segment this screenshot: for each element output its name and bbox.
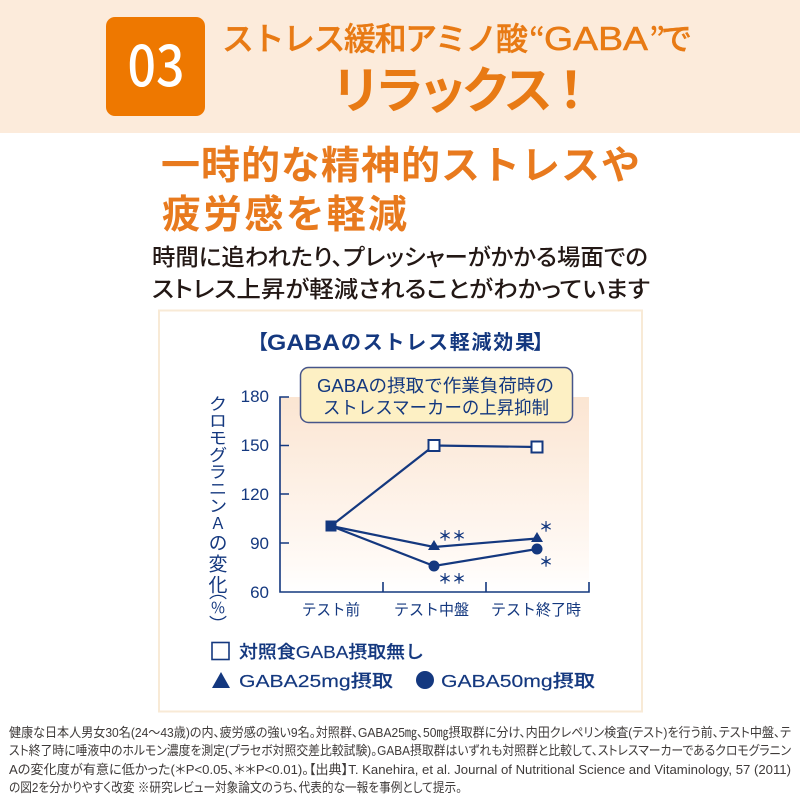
number badge 03 (106, 17, 205, 116)
plot background (280, 397, 589, 592)
y axis title: （ (205, 582, 231, 600)
x axis labels (302, 598, 581, 620)
chart title: 】 (533, 326, 553, 355)
chart title: GABA (267, 330, 340, 355)
number badge 03: 03 (128, 22, 184, 103)
y axis title: クロモグラニン (205, 395, 231, 514)
panel: chart card (159, 310, 642, 712)
x axis labels: テスト終了時 (491, 598, 581, 620)
significance asterisks: ＊ (539, 517, 553, 537)
chart title: 【 (248, 326, 268, 355)
y axis tick labels: 180 (241, 387, 269, 406)
main heading: 一時的な精神的ストレスや (161, 135, 640, 191)
callout (300, 368, 572, 422)
legend: 25mg: GABA25mg摂取 (239, 671, 394, 691)
significance asterisks: ＊ (539, 552, 553, 572)
legend: 50mg: GABA50mg摂取 (441, 671, 596, 691)
header title: ！ (546, 51, 596, 123)
header subtitle: で (661, 14, 692, 59)
y axis title: の変化 (204, 533, 232, 594)
header subtitle: “ (529, 14, 545, 59)
footnote: Aの変化度が有意に低かった(＊P<0.05、＊＊P<0.01)。【出典】T. Kanehira, et al. Journal of Nutritional Science and Vitaminology, 57 (2011) (9, 762, 791, 777)
legend (212, 642, 596, 691)
header title: リラックス (331, 51, 553, 123)
series: GABA 50mg (331, 526, 542, 572)
legend: control: 対照食GABA摂取無し (239, 642, 424, 662)
x axis labels: テスト前 (302, 598, 360, 620)
line chart axes (280, 397, 589, 592)
x axis labels: テスト中盤 (394, 598, 469, 620)
footnote (9, 725, 791, 795)
description text: 時間に追われたり、プレッシャーがかかる場面での (152, 238, 648, 272)
main heading (161, 135, 640, 240)
description text (152, 238, 650, 304)
header subtitle: GABA (544, 20, 648, 57)
y axis tick labels: 150 (241, 436, 269, 455)
description text: ストレス上昇が軽減されることがわかっています (152, 270, 650, 304)
header subtitle: ストレス緩和アミノ酸 (222, 14, 528, 60)
header subtitle: ” (649, 14, 665, 59)
y axis tick labels (241, 387, 269, 602)
chart title: のストレス軽減効果 (341, 326, 535, 355)
series: control (331, 440, 542, 526)
y axis title: ） (205, 615, 231, 633)
y axis title: Ａ (206, 515, 230, 531)
y axis tick labels: 90 (250, 534, 269, 553)
y axis title: ％ (208, 600, 228, 615)
start marker (326, 520, 336, 532)
y axis tick labels: 120 (241, 485, 269, 504)
y axis tick labels: 60 (250, 583, 269, 602)
main heading: 疲労感を軽減 (162, 184, 407, 240)
footnote: の図2を分かりやすく改変 ※研究レビュー対象論文のうち、代表的な一報を事例として提示。 (9, 780, 462, 795)
series: GABA 25mg (331, 526, 543, 550)
callout: ストレスマーカーの上昇抑制 (323, 394, 549, 420)
callout: GABAの摂取で作業負荷時の (317, 376, 554, 396)
significance asterisks (438, 517, 553, 589)
chart title (248, 326, 553, 355)
significance asterisks: ＊＊ (438, 526, 466, 546)
y axis title (204, 395, 232, 633)
header band (0, 0, 800, 133)
header subtitle (222, 14, 692, 60)
significance asterisks: ＊＊ (438, 569, 466, 589)
